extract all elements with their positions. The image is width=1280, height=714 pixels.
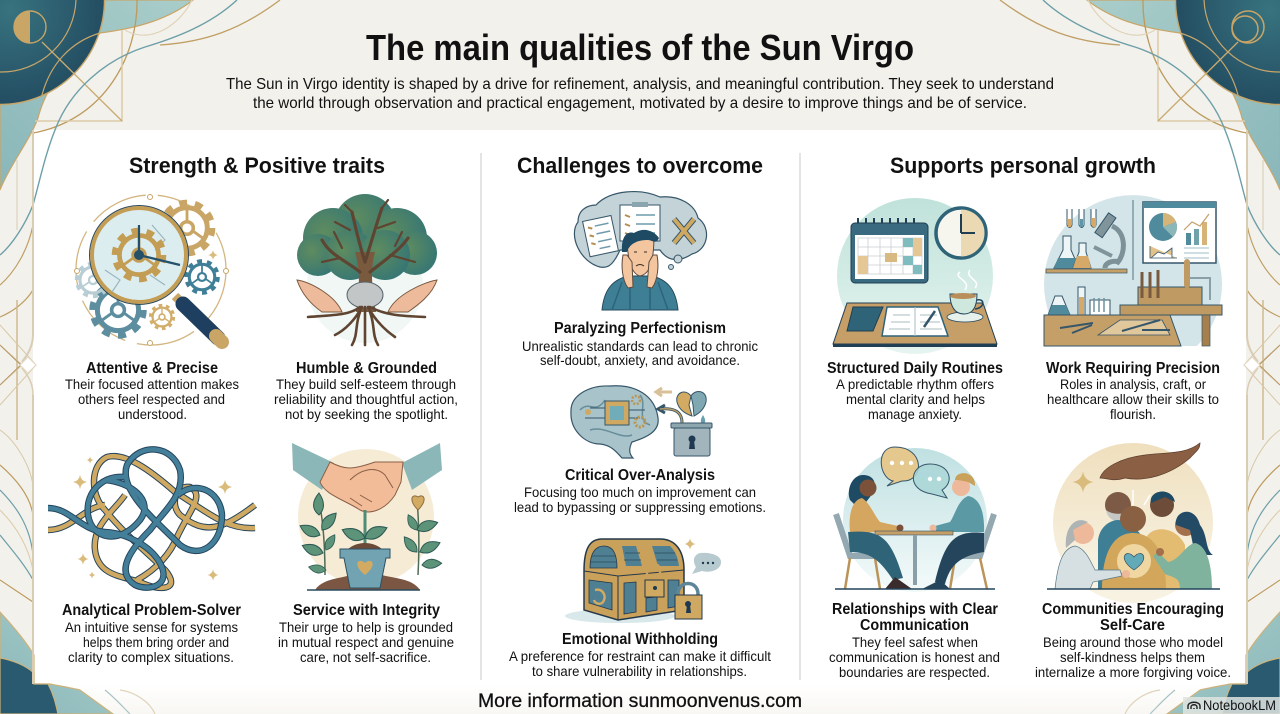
- description: in mutual respect and genuine: [278, 634, 454, 650]
- icon: half sun symbol: [14, 11, 46, 43]
- icon: magnifier and gears: [74, 194, 228, 346]
- label: Service with Integrity: [293, 602, 440, 619]
- description: Their urge to help is grounded: [279, 619, 453, 635]
- description: They build self-esteem through: [276, 376, 456, 392]
- item: structured daily routines: [827, 198, 1003, 422]
- description: care, not self-sacrifice.: [300, 649, 431, 665]
- description: communication is honest and: [829, 649, 1000, 665]
- icon: tree on stone held by hands: [297, 194, 437, 345]
- item: service with integrity: [278, 443, 454, 665]
- description: [65, 376, 239, 422]
- description: [1035, 634, 1231, 680]
- description: mental clarity and helps: [846, 391, 985, 407]
- description: clarity to complex situations.: [68, 649, 234, 665]
- intro text: The Sun in Virgo identity is shaped by a drive for refinement, analysis, and meaningful contribution. They seek to understand: [226, 76, 1054, 93]
- label: Attentive & Precise: [86, 360, 218, 377]
- intro text: the world through observation and practical engagement, motivated by a desire to improve things and be of service.: [253, 95, 1027, 112]
- description: [1047, 376, 1219, 422]
- heading: Strength & Positive traits: [129, 153, 385, 178]
- label: [832, 601, 998, 634]
- title: The main qualities of the Sun Virgo: [366, 27, 914, 68]
- heading: Challenges to overcome: [517, 153, 763, 178]
- icon: desk with calendar and clock: [833, 198, 997, 354]
- description: internalize a more forgiving voice.: [1035, 664, 1231, 680]
- panel: strength and positive traits: [48, 153, 458, 665]
- label: Critical Over-Analysis: [565, 467, 715, 484]
- decoration: right corners and border: [1000, 0, 1280, 714]
- item: critical over-analysis: [514, 386, 766, 515]
- description: An intuitive sense for systems: [65, 619, 238, 635]
- description: Roles in analysis, craft, or: [1060, 376, 1206, 392]
- description: [514, 484, 766, 515]
- item: relationships with clear communication: [829, 447, 1000, 680]
- description: flourish.: [1110, 406, 1156, 422]
- description: self-kindness helps them: [1060, 649, 1205, 665]
- icon: laboratory and workshop: [1044, 195, 1222, 346]
- description: not by seeking the spotlight.: [285, 406, 448, 422]
- item: attentive and precise: [65, 194, 239, 422]
- label: [1042, 601, 1224, 634]
- description: They feel safest when: [852, 634, 978, 650]
- description: self-doubt, anxiety, and avoidance.: [540, 352, 740, 368]
- description: to share vulnerability in relationships.: [532, 663, 747, 679]
- icon: brain with locked heart: [571, 386, 712, 458]
- decoration: left corners and border: [0, 0, 280, 714]
- item: paralyzing perfectionism: [522, 192, 758, 368]
- label: Communication: [860, 617, 969, 634]
- label: Work Requiring Precision: [1046, 360, 1220, 377]
- item: analytical problem-solver: [48, 449, 255, 665]
- description: healthcare allow their skills to: [1047, 391, 1219, 407]
- description: understood.: [118, 406, 187, 422]
- label: Emotional Withholding: [562, 631, 718, 648]
- white content panel: [33, 130, 1246, 684]
- description: others feel respected and: [78, 391, 225, 407]
- description: A predictable rhythm offers: [836, 376, 994, 392]
- description: [836, 376, 994, 422]
- description: helps them bring order and: [83, 634, 229, 650]
- description: Being around those who model: [1043, 634, 1223, 650]
- label: Analytical Problem-Solver: [62, 602, 241, 619]
- label: Humble & Grounded: [296, 360, 437, 377]
- icon: crescent moon symbol: [1232, 11, 1264, 43]
- label: Communities Encouraging: [1042, 601, 1224, 618]
- icon: locked treasure chest: [565, 538, 721, 623]
- description: [65, 619, 238, 665]
- label: Paralyzing Perfectionism: [554, 320, 726, 337]
- description: [829, 634, 1000, 680]
- panel: supports personal growth: [827, 153, 1231, 680]
- icon: community group under caring hand: [1047, 443, 1220, 603]
- icon: two people talking at a table: [835, 447, 995, 592]
- label: Self-Care: [1100, 617, 1165, 634]
- description: lead to bypassing or suppressing emotions.: [514, 499, 766, 515]
- item: emotional withholding: [509, 538, 771, 679]
- icon: worried person with thought cloud: [574, 192, 707, 310]
- description: [278, 619, 454, 665]
- label: Relationships with Clear: [832, 601, 998, 618]
- description: Unrealistic standards can lead to chronic: [522, 338, 758, 354]
- icon: interlaced knot: [48, 449, 255, 588]
- description: manage anxiety.: [868, 406, 962, 422]
- description: [509, 648, 771, 679]
- item: work requiring precision: [1044, 195, 1222, 422]
- label: Structured Daily Routines: [827, 360, 1003, 377]
- item: communities encouraging self-care: [1035, 443, 1231, 680]
- description: boundaries are respected.: [839, 664, 990, 680]
- description: reliability and thoughtful action,: [274, 391, 458, 407]
- description: Focusing too much on improvement can: [524, 484, 756, 500]
- panel: challenges to overcome: [509, 153, 771, 679]
- description: [522, 338, 758, 368]
- description: Their focused attention makes: [65, 376, 239, 392]
- heading: Supports personal growth: [890, 153, 1156, 178]
- icon: handshake and plant: [292, 443, 442, 590]
- description: A preference for restraint can make it difficult: [509, 648, 771, 664]
- intro text: [226, 76, 1054, 112]
- description: [274, 376, 458, 422]
- item: humble and grounded: [274, 194, 458, 422]
- footer link text: More information sunmoonvenus.com: [478, 691, 802, 712]
